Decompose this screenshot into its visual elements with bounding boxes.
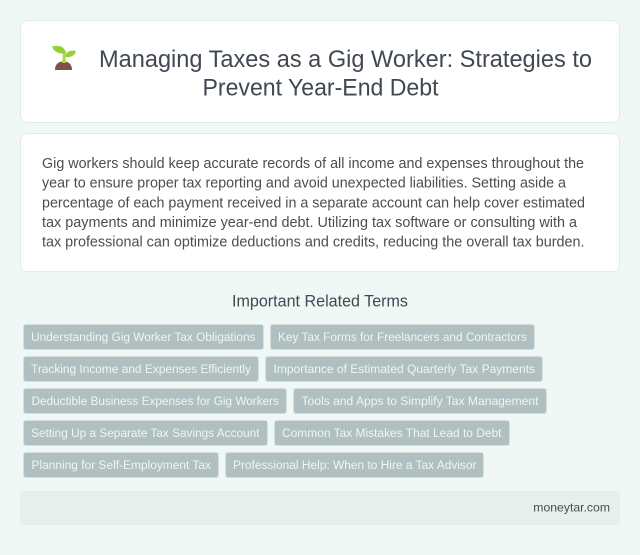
text block: summary: percentage of each payment received in a separate account can help cover estimated [42,194,585,211]
panel: related term tags [24,324,546,478]
footer: source: moneytar.com [533,501,610,515]
tag: Common Tax Mistakes That Lead to Debt [282,426,502,440]
tag [24,420,268,446]
tag: Setting Up a Separate Tax Savings Account [31,426,260,440]
tag [294,388,546,414]
tag [270,324,534,350]
tag [24,356,258,382]
tag [24,388,286,414]
tag: Deductible Business Expenses for Gig Workers [32,394,279,408]
tag: Tracking Income and Expenses Efficiently [31,362,252,376]
tag [226,452,484,478]
icon: sprout [52,46,76,70]
text block: summary: tax payments and minimize year-end debt. Utilizing tax software or consulting with a [42,214,578,231]
tag: Planning for Self-Employment Tax [32,458,212,472]
tag [274,420,510,446]
title: Prevent Year-End Debt [202,76,439,102]
text block: summary: Gig workers should keep accurate records of all income and expenses throughout the [42,155,584,172]
tag [24,324,264,350]
panel: title card [20,20,620,122]
panel: summary card [20,134,620,272]
title: Managing Taxes as a Gig Worker: Strategies to [99,47,592,73]
tag: Tools and Apps to Simplify Tax Management [302,394,539,408]
title [99,47,592,102]
tag: Key Tax Forms for Freelancers and Contractors [278,330,527,344]
tag [24,452,218,478]
tag [266,356,542,382]
tag: Importance of Estimated Quarterly Tax Payments [274,362,535,376]
tag: Understanding Gig Worker Tax Obligations [31,330,256,344]
heading: related terms: Important Related Terms [232,293,408,311]
text block: summary: year to ensure proper tax reporting and avoid unexpected liabilities. Setting aside a [42,175,567,192]
text block: summary [42,155,585,250]
footer [20,491,620,525]
tag: Professional Help: When to Hire a Tax Advisor [233,458,476,472]
text block: summary: tax professional can optimize deductions and credits, reducing the overall tax burden. [42,234,584,250]
